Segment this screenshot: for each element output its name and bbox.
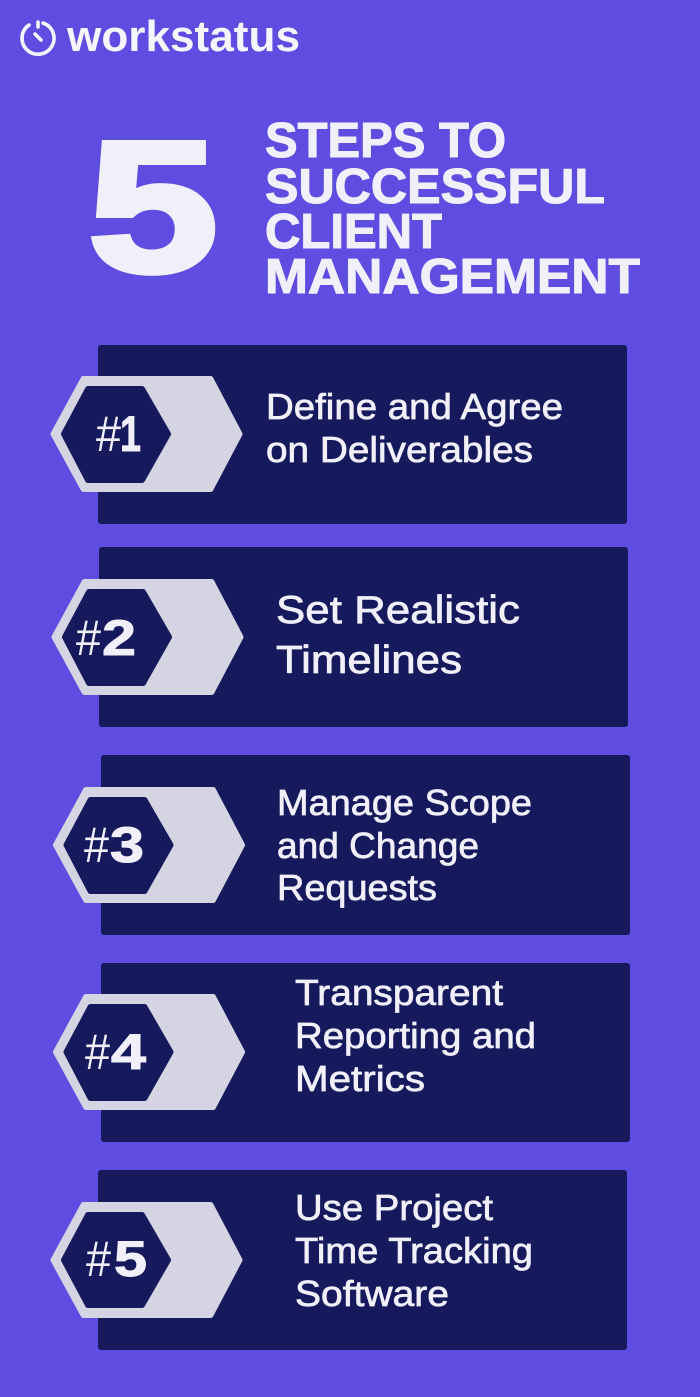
step text: Time Tracking <box>295 1230 533 1271</box>
hexagon badge <box>54 1205 240 1315</box>
panel: step 5 <box>54 1170 627 1350</box>
step text: Metrics <box>295 1058 425 1099</box>
hexagon badge: # <box>86 1231 111 1287</box>
heading: SUCCESSFUL <box>265 160 605 214</box>
heading <box>265 114 640 304</box>
panel: step 4 <box>56 963 630 1142</box>
hexagon badge: # <box>84 817 109 873</box>
hexagon badge: 3 <box>110 817 144 873</box>
step text: on Deliverables <box>266 429 533 470</box>
panel background <box>101 963 630 1142</box>
hexagon badge <box>54 379 240 489</box>
step text: Timelines <box>276 639 462 682</box>
step text: Requests <box>277 867 437 908</box>
hexagon badge <box>56 790 242 900</box>
hexagon badge <box>56 997 242 1107</box>
step text: Reporting and <box>295 1015 536 1056</box>
panel background <box>101 755 630 935</box>
panel: step 3 <box>56 755 630 935</box>
logo wordmark: workstatus <box>66 12 300 61</box>
step text <box>295 1187 533 1314</box>
step text: Set Realistic <box>276 589 520 632</box>
hexagon badge <box>54 582 240 692</box>
big numeral 5: 5 <box>88 104 218 311</box>
step text: Use Project <box>295 1187 493 1228</box>
hexagon badge: 4 <box>111 1024 146 1080</box>
icon: stopwatch <box>22 22 54 54</box>
step text <box>266 386 563 470</box>
panel: step 1 <box>54 345 627 524</box>
step text: Software <box>295 1273 449 1314</box>
hexagon badge: # <box>85 1024 110 1080</box>
heading: MANAGEMENT <box>265 250 640 304</box>
hexagon badge: 1 <box>120 406 141 462</box>
step text: Transparent <box>295 972 503 1013</box>
panel: step 2 <box>54 547 628 727</box>
step text: Manage Scope <box>277 782 532 823</box>
step text <box>276 589 520 682</box>
heading: CLIENT <box>265 205 442 259</box>
hexagon badge: # <box>76 610 101 666</box>
panel background <box>99 547 628 727</box>
hexagon badge: 5 <box>114 1231 147 1287</box>
panel background <box>98 345 627 524</box>
step text <box>295 972 536 1099</box>
step text: Define and Agree <box>266 386 563 427</box>
logo: workstatus <box>22 12 300 61</box>
panel background <box>98 1170 627 1350</box>
step text <box>277 782 532 908</box>
heading: STEPS TO <box>265 114 506 168</box>
hexagon badge: 2 <box>102 610 136 666</box>
hexagon badge: # <box>96 406 121 462</box>
step text: and Change <box>277 825 479 866</box>
